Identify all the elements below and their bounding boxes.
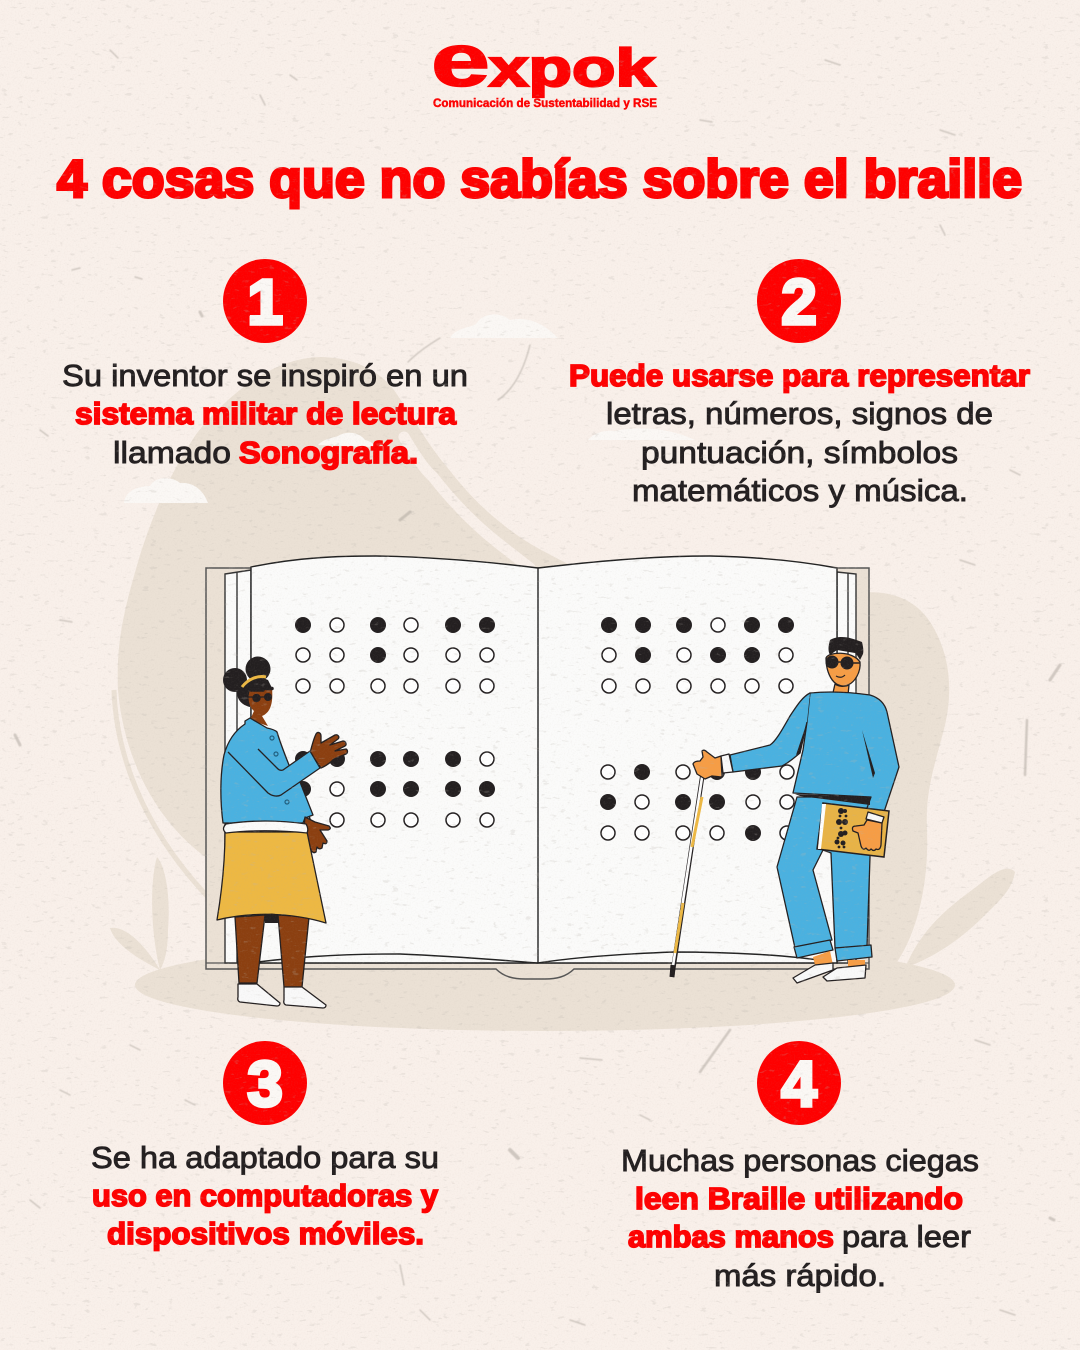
text: fact 4: para leer [842, 1219, 971, 1254]
number badge 4: 4 [781, 1048, 817, 1120]
jacket [221, 718, 313, 823]
text: fact 3: dispositivos móviles. [107, 1216, 424, 1251]
text: fact 3: Se ha adaptado para su [91, 1140, 439, 1175]
text: fact 1: sistema militar de lectura [75, 396, 457, 431]
extended hand [693, 750, 722, 779]
shoes [238, 984, 326, 1008]
number badge 4 [757, 1041, 841, 1125]
clothing shadows [795, 722, 875, 805]
text: fact 4: leen Braille utilizando [635, 1181, 963, 1216]
braille dots: left page top [295, 617, 495, 693]
panel: fact 2 [569, 259, 1030, 508]
number badge 1: 1 [247, 266, 283, 338]
legs [235, 915, 309, 987]
hair buns [223, 656, 273, 707]
torso [793, 692, 899, 812]
man's sunglasses [826, 656, 860, 677]
book cover [206, 568, 869, 979]
page edges [225, 570, 856, 963]
logo: expok: Comunicación de Sustentabilidad y RSE [433, 96, 657, 110]
number badge 3: 3 [247, 1048, 283, 1120]
braille dots: left page bottom [295, 751, 495, 827]
jacket buttons [270, 736, 289, 804]
panel: fact 4 [621, 1041, 979, 1293]
extended cuff [721, 754, 733, 773]
text: fact 1: Sonografía. [239, 435, 418, 470]
panel: fact 1 [62, 259, 468, 470]
skirt [217, 832, 326, 923]
book pages [251, 556, 837, 963]
text: fact 4: ambas manos [628, 1219, 834, 1254]
head and neck [249, 688, 272, 726]
title: 4 cosas que no sabías sobre el braille [57, 150, 1022, 209]
extended arm [730, 693, 810, 772]
text: fact 4: Muchas personas ciegas [621, 1143, 979, 1178]
text: fact 4: más rápido. [714, 1258, 886, 1293]
man's hair [828, 637, 863, 660]
text: fact 1 [62, 358, 468, 470]
illustration: open braille book [206, 556, 869, 979]
illustration: woman with sunglasses [217, 656, 348, 1008]
background illustration: beige shapes [110, 357, 1015, 1031]
text: fact 4 [621, 1143, 979, 1293]
cane [672, 758, 705, 977]
clouds [124, 314, 695, 503]
braille dots: right page top [601, 617, 794, 693]
hand on book [852, 820, 882, 850]
braille dots: right page bottom [600, 764, 794, 841]
text: fact 2 [569, 358, 1030, 508]
text: fact 2: Puede usarse para representar [569, 358, 1030, 393]
text: fact 2: puntuación, símbolos [641, 435, 958, 470]
illustration: man with cane and book [672, 637, 899, 983]
text: fact 3 [91, 1140, 439, 1251]
logo: expok [431, 19, 657, 110]
upper hand [310, 733, 348, 768]
number badge 2: 2 [781, 266, 817, 338]
ankles [813, 951, 865, 967]
text: fact 2: matemáticos y música. [632, 473, 968, 508]
man's head [826, 653, 860, 686]
text: fact 2: letras, números, signos de [606, 396, 993, 431]
jacket sleeve [228, 749, 320, 796]
text: fact 3: uso en computadoras y [92, 1178, 439, 1213]
book-arm cuff [866, 812, 884, 823]
man's neck [832, 684, 849, 701]
shoes [793, 963, 866, 983]
trousers [777, 797, 870, 948]
waistband [224, 821, 308, 833]
number badge 3 [223, 1041, 307, 1125]
number badge 2 [757, 259, 841, 343]
pale swoosh gap in background shape [404, 437, 530, 568]
text: fact 1: Su inventor se inspiró en un [62, 358, 468, 393]
cuffs [794, 940, 872, 961]
panel: fact 3 [91, 1041, 439, 1251]
logo: expok: xpok [489, 39, 656, 98]
logo: expok: e [431, 19, 490, 102]
lower hand [304, 817, 330, 853]
headband and sunglasses [242, 676, 272, 702]
text: fact 1: llamado [113, 435, 231, 470]
number badge 1 [223, 259, 307, 343]
yellow braille book [817, 803, 889, 857]
